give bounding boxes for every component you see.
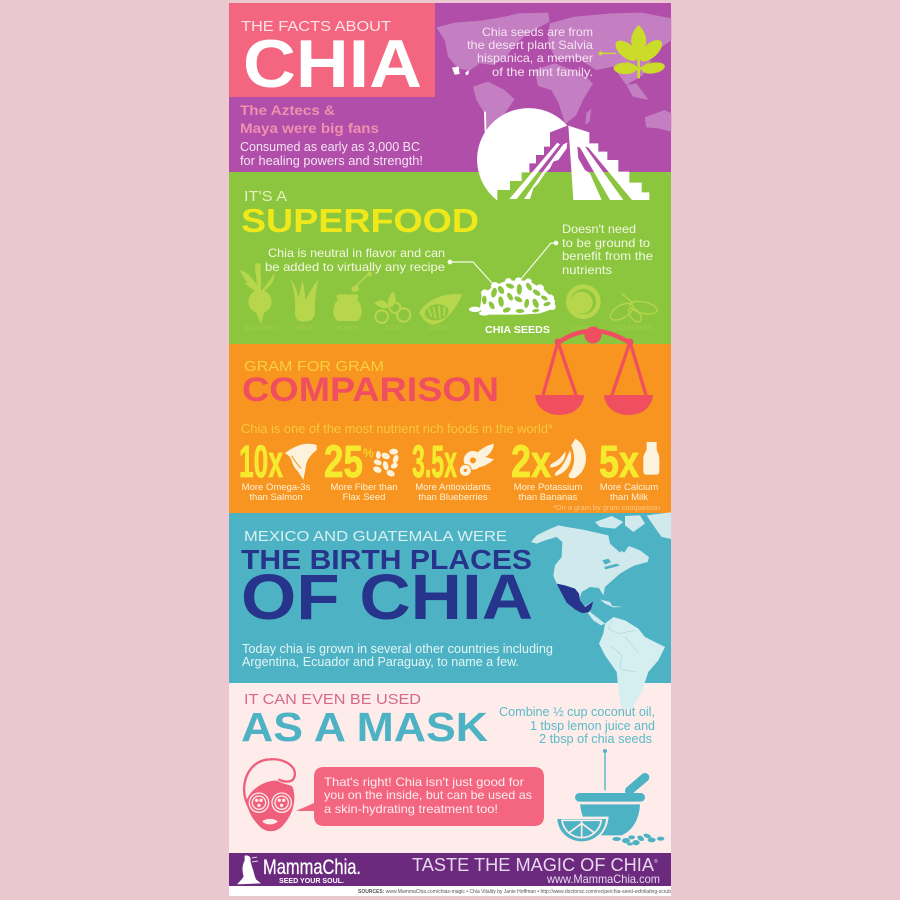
icon: plant leaves [599,25,666,78]
speech bubble: That's right! Chia isn't just good for [324,775,524,789]
icon: mortar pestle lemon [555,749,664,846]
sources line: SOURCES: www.MammaChia.com/chias-magic • Chia Vitality by Janie Hoffman • http://www.doctoroz.com/recipe/chia-seed-exfoliating-scrub [358,889,671,895]
icon: bananas [550,439,586,478]
icon: salmon [285,444,317,480]
footer band [229,853,671,886]
title block [229,3,435,102]
speech bubble: a skin-hydrating treatment too! [324,802,498,816]
food labels: GOJI BERRIES [613,325,654,332]
speech bubble [296,767,544,826]
Aztecs text [240,140,423,168]
highlighted origin spots [452,67,486,132]
panel: comparison [229,344,671,513]
recipe text: 1 tbsp lemon juice and [530,719,655,733]
recipe text [499,705,655,746]
Aztecs text: Consumed as early as 3,000 BC [240,140,420,154]
ground text [562,222,653,277]
tagline: ® [654,858,658,865]
stat: omega-3s: than Salmon [249,492,303,503]
icon: face mask [244,759,295,831]
neutral flavor text: Chia is neutral in flavor and can [268,246,445,260]
food labels: COCONUT [570,325,594,332]
heading: OF CHIA [241,561,533,633]
intro text: Chia is one of the most nutrient rich foods in the world* [241,422,553,436]
heading: THE BIRTH PLACES [241,544,532,575]
world map [436,13,671,132]
tagline [412,854,660,886]
Aztecs heading: Maya were big fans [240,120,379,136]
food labels [244,325,654,332]
heading [241,528,533,633]
icon: balance scale [535,326,653,415]
salvia description: the desert plant Salvia [467,38,593,52]
stat: calcium: 5x [599,436,639,487]
stat: potassium [511,436,586,503]
food labels: KELP [297,325,313,332]
footnote: *On a gram by gram comparison [553,505,660,512]
heading: IT'S A [244,188,287,205]
heading: MEXICO AND GUATEMALA WERE [244,528,507,545]
heading: AS A MASK [241,704,488,750]
icon: cacao pod [419,294,462,324]
icon: blueberries [459,444,494,476]
icon: chia seeds pile [469,277,556,316]
panel: birth places [229,512,673,709]
icon: pyramid [477,108,649,200]
speech bubble: you on the inside, but can be used as [324,788,532,802]
body text [242,642,553,669]
connector: flavor to seeds [448,260,493,284]
ground text: Doesn't need [562,222,636,236]
stat: potassium: More Potassium [514,482,582,493]
salvia description: of the mint family. [492,65,593,79]
food icons [240,263,462,324]
heading: GRAM FOR GRAM [244,358,384,375]
stat: potassium: 2x [511,436,551,487]
heading [241,188,479,239]
stat: calcium: than Milk [610,492,648,503]
heading: SUPERFOOD [241,202,479,239]
food labels: CACAO [429,325,448,332]
Aztecs heading: The Aztecs & [240,102,335,118]
logo text: SEED YOUR SOUL. [279,876,344,885]
icon: goji berries [608,293,658,324]
stat: calcium: More Calcium [600,482,658,493]
Mexico highlight [557,584,593,613]
panel: the facts about chia [229,3,671,173]
icon: acai berries [374,292,410,323]
stat: antioxidants: 3.5x [412,436,457,487]
tagline: TASTE THE MAGIC OF CHIA [412,854,655,875]
icon: milk bottle [643,442,659,475]
neutral flavor text [265,246,445,274]
stat: fiber: Flax Seed [343,492,385,503]
food labels: MACA ROOT [244,325,278,332]
title block: THE FACTS ABOUT [241,18,391,35]
salvia description: Chia seeds are from [482,25,593,39]
heading: IT CAN EVEN BE USED [244,691,421,708]
logo text [263,856,361,885]
ground text: to be ground to [562,236,650,250]
stat: antioxidants: More Antioxidants [415,482,491,493]
icon: woman silhouette logo [238,856,260,884]
stat: fiber [324,436,400,503]
salvia description: hispanica, a member [477,51,593,65]
food labels: HONEY [336,325,359,332]
recipe text: Combine ½ cup coconut oil, [499,705,655,719]
panel: superfood [229,172,671,344]
icon: maca root [240,263,274,324]
recipe text: 2 tbsp of chia seeds [539,732,652,746]
map: the Americas [531,512,673,709]
chia seeds label: CHIA SEEDS [485,324,550,336]
salvia description [467,25,593,79]
panel: mask [229,683,671,853]
logo text: MammaChia. [263,856,361,879]
stat: omega-3s: 10x [239,436,283,487]
heading [242,358,499,409]
icon: honey jar [333,272,372,321]
icon: kelp [290,278,318,322]
connector: ground to seeds [521,241,558,279]
ground text: nutrients [562,263,612,277]
stat: fiber: % [363,446,374,460]
icon: flax seeds [372,449,400,478]
Aztecs heading [240,102,379,136]
stat: fiber: More Fiber than [330,482,398,493]
stat: potassium: than Bananas [519,492,578,503]
tagline: www.MammaChia.com [546,872,660,886]
body text: Argentina, Ecuador and Paraguay, to name a few. [242,655,519,669]
Aztecs text: for healing powers and strength! [240,154,423,168]
food labels: ACAI [385,325,402,332]
heading: COMPARISON [242,371,499,409]
icon: coconut [568,287,598,317]
stat: fiber: 25 [324,436,363,487]
title block: CHIA [243,26,422,102]
stat: antioxidants: than Blueberries [418,492,488,503]
ground text: benefit from the [562,249,653,263]
stat: calcium [599,436,659,503]
body text: Today chia is grown in several other countries including [242,642,553,656]
neutral flavor text: be added to virtually any recipe [265,260,445,274]
stat: omega-3s: More Omega-3s [242,482,311,493]
